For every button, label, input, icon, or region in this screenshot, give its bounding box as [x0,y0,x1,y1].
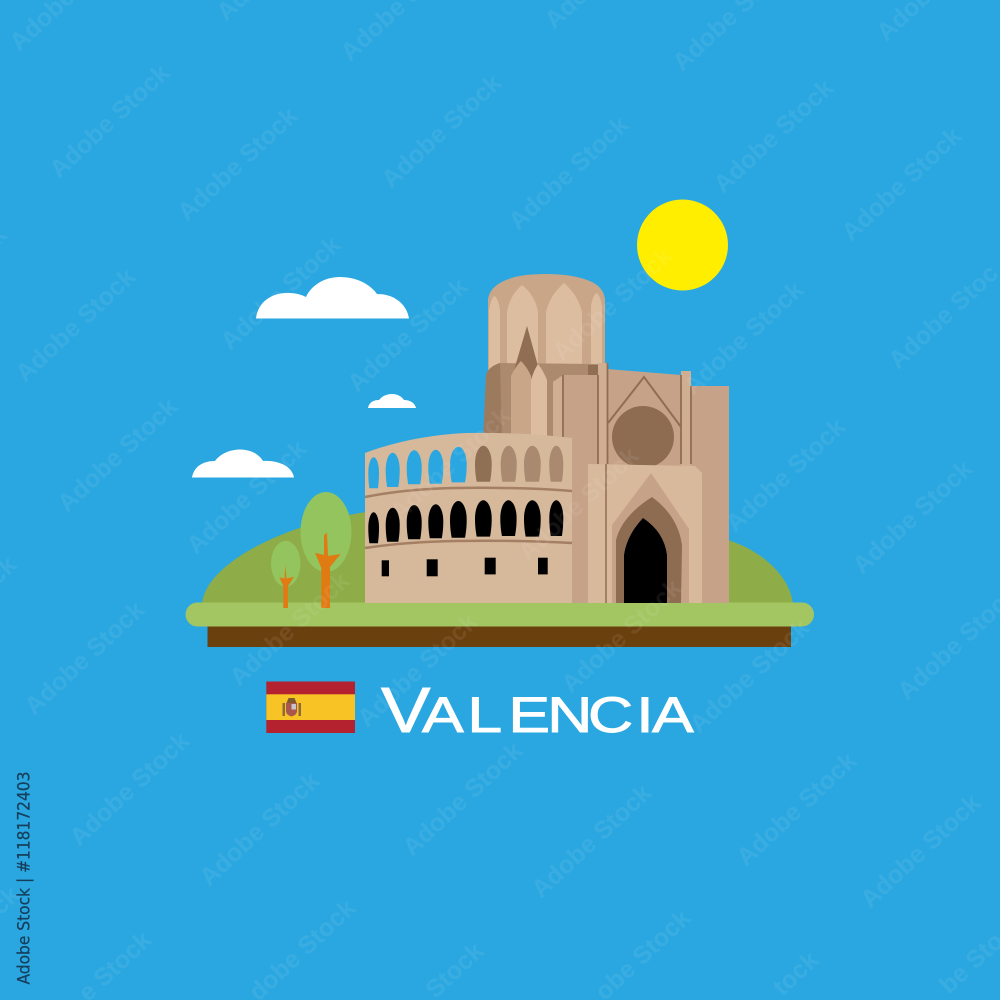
watermarks: Adobe Stock [19,596,150,720]
ground [186,602,814,647]
watermarks: Adobe Stock [678,276,809,400]
watermarks: Adobe Stock [547,242,678,366]
flag yellow band [266,694,355,720]
left wall [553,375,598,603]
wall [365,433,572,603]
icon: small cloud [368,394,416,408]
rose window [612,406,674,468]
tower windows [489,283,602,372]
portal [588,464,702,603]
watermarks: Adobe Stock [397,737,528,861]
middle arch [616,497,682,603]
watermarks: Adobe Stock [708,74,839,198]
watermarks: Adobe Stock [224,567,355,691]
watermarks: Adobe Stock [172,102,303,226]
watermarks: Adobe Stock [376,69,507,193]
title: V [381,674,431,746]
lower drum [483,363,598,442]
grass strip [186,602,814,626]
gable triangle [608,377,681,427]
icon: left cloud [192,450,294,478]
watermarks: Adobe Stock [52,393,183,517]
tower body [488,274,605,372]
hills [202,512,793,604]
watermarks: Adobe Stock [556,574,687,698]
bell tower [488,274,605,372]
portal line [605,464,607,603]
watermarks: Adobe Stock [10,263,141,387]
watermarks: Adobe Stock [342,273,473,397]
watermarks: Adobe Stock [526,779,657,903]
watermarks: Adobe Stock [836,122,967,246]
icon: large cloud [256,277,409,318]
stock id text: Adobe Stock | #118172403 [14,772,34,984]
watermarks: Adobe Stock [513,442,644,566]
watermarks: Adobe Stock [731,747,862,871]
watermarks: Adobe Stock [855,789,986,913]
left wall strip [553,375,563,440]
upper arches open [368,447,467,488]
colosseum building [365,433,572,603]
spire [512,326,541,378]
watermarks: tock [767,946,824,1000]
cornice lines [365,488,572,548]
right wing [691,386,729,603]
facade lines [563,363,691,464]
cathedral [365,274,729,603]
coat of arms [282,698,301,716]
lower arches [368,500,563,543]
upper arch dark [475,446,492,482]
right hill [728,540,793,604]
centre wall [607,369,681,603]
left buttress [598,363,607,603]
left hill [202,512,366,604]
pinnacle left [511,361,531,436]
pinnacle right [531,364,547,438]
title [381,674,694,746]
watermarks: Adobe Stock [503,111,634,235]
drum shade right [588,365,598,376]
watermarks: Adobe Stock [684,614,815,738]
watermarks: Adobe Stock [64,727,195,851]
tree trunk [315,533,341,608]
watermarks: Adobe Stock [215,231,346,355]
tree trunk [279,565,294,608]
outer arch [612,473,689,603]
portal block [588,464,702,603]
square windows [382,558,548,576]
watermarks: Adobe Stock [352,608,483,732]
door [624,518,667,603]
title: ALENCIA [422,687,694,743]
flag of Spain [266,682,355,733]
upper arches shaded [501,446,563,482]
small tree [271,541,300,608]
drum shadow [483,363,502,442]
tree crown [271,541,300,587]
watermarks: Adobe Stock [720,413,851,537]
tree crown [300,492,352,572]
icon: sun [637,200,728,290]
watermarks: Adobe Stock [847,455,978,579]
watermarks: Adobe Stock [181,435,312,559]
watermarks: Adobe Stock [44,59,175,183]
flag red bands [266,682,355,733]
main facade [553,363,729,603]
watermarks: Adobe Stock [385,402,516,526]
right buttress [681,371,691,603]
large tree [300,492,352,608]
soil [208,625,791,647]
watermarks: Adobe Stock [194,767,325,891]
